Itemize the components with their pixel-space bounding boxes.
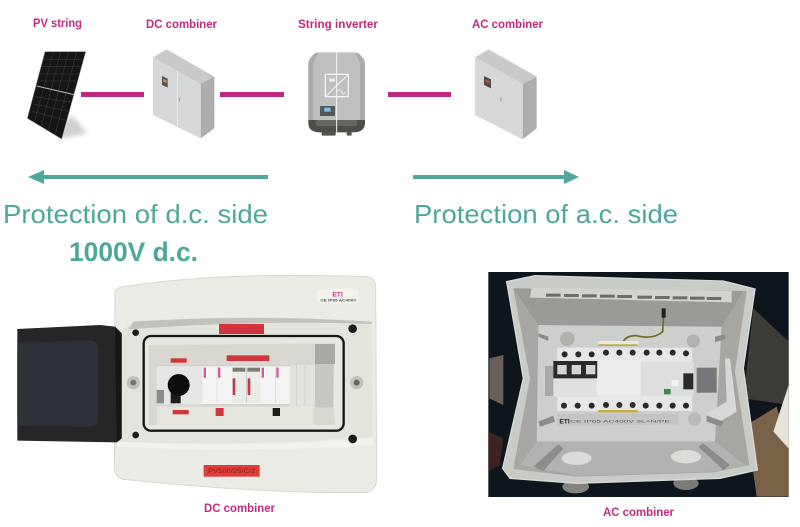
photo: AC combiner enclosure bbox=[488, 272, 789, 497]
door bbox=[17, 325, 122, 442]
standoffs bbox=[533, 332, 730, 471]
screws bbox=[132, 324, 357, 443]
text: 1000V d.c.: 1000V d.c. bbox=[69, 237, 198, 267]
red labels bbox=[219, 324, 264, 334]
top rail bbox=[530, 288, 732, 302]
icon: AC combiner cabinet bbox=[475, 49, 537, 139]
icon: DC combiner cabinet bbox=[153, 49, 214, 138]
heading: DC combiner: DC combiner bbox=[146, 17, 217, 31]
photo: DC combiner enclosure: CE IP65 AC400V bbox=[320, 298, 357, 302]
text: protection of d.c. side: Protection of d.c. side bbox=[3, 199, 268, 229]
photo background bbox=[488, 272, 789, 497]
breaker row bbox=[157, 366, 290, 404]
connector: DC combiner to inverter bbox=[220, 92, 284, 97]
right hardware bbox=[697, 368, 717, 393]
photo: DC combiner enclosure: ETI bbox=[332, 291, 343, 298]
text: protection of a.c. side: Protection of a.c. side bbox=[414, 199, 678, 229]
housing bbox=[503, 276, 757, 483]
earth wire bbox=[623, 310, 664, 342]
lower plate bbox=[557, 413, 678, 426]
icon: PV panel bbox=[27, 52, 87, 139]
heading: PV string: PV string bbox=[33, 16, 82, 30]
photo: DC combiner enclosure bbox=[17, 275, 377, 493]
caption: DC combiner: DC combiner bbox=[204, 501, 275, 515]
heading: AC combiner: AC combiner bbox=[472, 17, 543, 31]
enclosure body bbox=[114, 275, 377, 493]
photo: AC combiner enclosure: CE IP65 AC400V 3L+N/PE bbox=[570, 418, 671, 423]
arrow: protection of d.c. side bbox=[28, 170, 268, 184]
logo plate bbox=[317, 288, 359, 304]
heading: String inverter: String inverter bbox=[298, 17, 378, 31]
connector: inverter to AC combiner bbox=[388, 92, 451, 97]
caption: AC combiner: AC combiner bbox=[603, 505, 674, 519]
arrow: protection of a.c. side bbox=[413, 170, 579, 184]
glands bbox=[562, 480, 589, 493]
model plate bbox=[204, 465, 260, 477]
photo: DC combiner enclosure: PV500/25/C/2 bbox=[208, 468, 256, 475]
photo: AC combiner enclosure: ETI bbox=[559, 418, 570, 425]
connector: PV to DC combiner bbox=[81, 92, 144, 97]
din row bbox=[557, 348, 692, 411]
gasket frame and interior bbox=[144, 336, 344, 431]
terminals bbox=[561, 350, 689, 409]
icon: string inverter bbox=[308, 52, 365, 136]
